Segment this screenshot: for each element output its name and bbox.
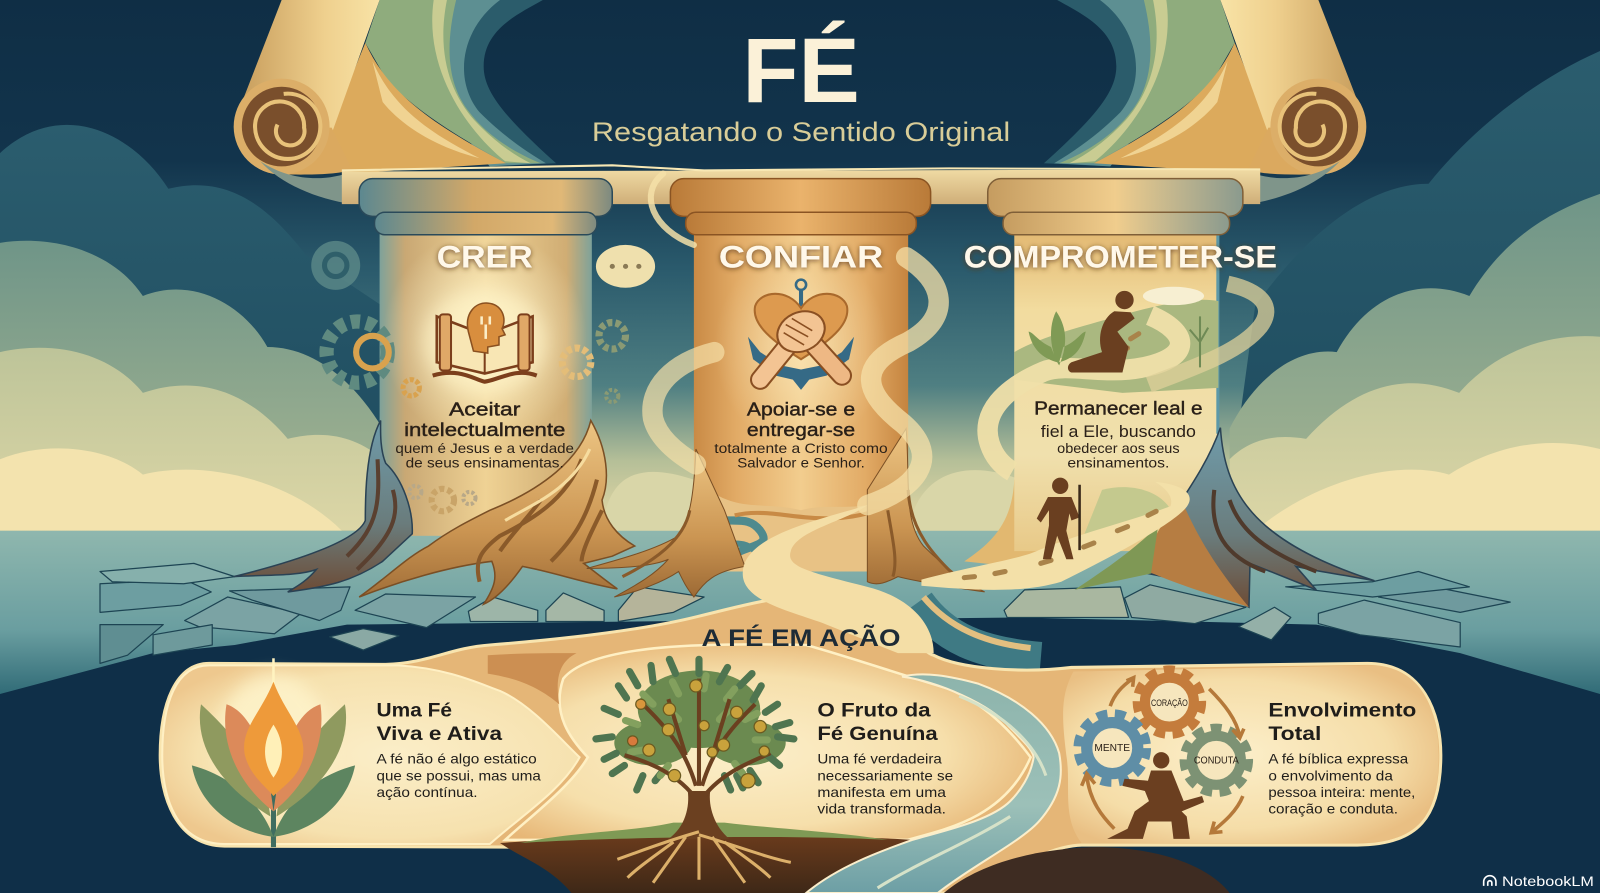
text: comprometer-se description: ensinamentos. bbox=[1067, 455, 1169, 471]
text: uma fé viva e ativa: ação contínua. bbox=[377, 785, 478, 801]
tan fold above panel one bbox=[488, 653, 577, 704]
gear: mente bbox=[1080, 715, 1145, 781]
text: o fruto da fé genuína: necessariamente se bbox=[817, 769, 953, 785]
gear: conduta bbox=[1186, 730, 1247, 791]
right parchment scroll bbox=[1044, 0, 1366, 175]
inner leaves bbox=[626, 676, 767, 776]
decorative gears around crer bbox=[311, 241, 655, 511]
text: envolvimento total: o envolvimento da bbox=[1268, 769, 1393, 785]
sea bbox=[0, 531, 1600, 696]
text: confiar description bbox=[714, 398, 888, 471]
icon: book scroll and head bbox=[423, 291, 546, 393]
roots: crer bbox=[234, 420, 635, 604]
pillar: confiar bbox=[670, 179, 931, 572]
text: crer description: Aceitar bbox=[449, 398, 520, 419]
gear: conduta: CONDUTA bbox=[1194, 755, 1239, 766]
icon: heart anchor and clasped hands bbox=[748, 280, 854, 390]
grass under tree bbox=[520, 823, 888, 843]
cracked rock ground bbox=[100, 563, 1510, 663]
right clouds bbox=[1224, 51, 1600, 531]
icon: fruit tree bbox=[596, 659, 794, 883]
text: crer description: quem é Jesus e a verdade bbox=[395, 441, 574, 457]
tree roots bbox=[617, 832, 791, 883]
ribbons around confiar bbox=[651, 173, 939, 505]
right soil bbox=[944, 847, 1230, 893]
text: uma fé viva e ativa: Viva e Ativa bbox=[377, 723, 502, 745]
text: uma fé viva e ativa bbox=[377, 699, 541, 801]
text: uma fé viva e ativa: que se possui, mas uma bbox=[377, 769, 541, 785]
gear: coração: CORAÇÃO bbox=[1151, 698, 1188, 708]
left clouds bbox=[0, 125, 383, 531]
pillar heading: crer: CRER bbox=[437, 238, 533, 274]
panel: a fé em ação banner bbox=[160, 597, 1441, 893]
roots: comprometer-se bbox=[1074, 428, 1374, 607]
pillar heading: comprometer-se: COMPROMETER-SE bbox=[964, 238, 1277, 274]
text: confiar description: entregar-se bbox=[747, 419, 855, 440]
left parchment scroll bbox=[234, 0, 556, 175]
trunk and branches bbox=[668, 791, 730, 839]
text: envolvimento total: A fé bíblica expressa bbox=[1268, 751, 1408, 767]
panel two bbox=[505, 644, 1031, 840]
text: envolvimento total: Envolvimento bbox=[1268, 699, 1417, 721]
soil under tree bbox=[500, 836, 914, 893]
text: confiar description: Apoiar-se e bbox=[747, 398, 855, 419]
text: o fruto da fé genuína: O Fruto da bbox=[817, 699, 931, 721]
roots: confiar bbox=[587, 429, 985, 597]
canopy mass bbox=[614, 671, 786, 765]
panel one bbox=[162, 665, 580, 844]
pillar heading: confiar: CONFIAR bbox=[719, 238, 883, 274]
icon: flame lotus bbox=[192, 658, 355, 847]
text: confiar description: totalmente a Cristo como bbox=[714, 441, 888, 457]
winding trail of comprometer-se bbox=[921, 284, 1266, 590]
text: comprometer-se description: fiel a Ele, buscando bbox=[1041, 423, 1196, 441]
text: uma fé viva e ativa: A fé não é algo estático bbox=[377, 751, 537, 767]
cream river bbox=[743, 505, 934, 653]
text: comprometer-se description: Permanecer leal e bbox=[1034, 397, 1203, 418]
text: crer description bbox=[395, 398, 574, 471]
heading: a fé em ação: A FÉ EM AÇÃO bbox=[702, 624, 901, 652]
entablature beam bbox=[260, 161, 1340, 204]
title: FÉ bbox=[742, 19, 860, 122]
subtitle: Resgatando o Sentido Original bbox=[592, 117, 1010, 147]
dark ground bbox=[0, 617, 1600, 893]
text: envolvimento total bbox=[1268, 699, 1417, 817]
text: uma fé viva e ativa: Uma Fé bbox=[377, 699, 452, 721]
text: crer description: intelectualmente bbox=[404, 419, 565, 440]
notebooklm watermark: NotebookLM bbox=[1502, 874, 1594, 889]
arrows around gears bbox=[1082, 678, 1244, 833]
stream highlights bbox=[878, 696, 1046, 888]
text: envolvimento total: pessoa inteira: mente, bbox=[1268, 785, 1415, 801]
text: comprometer-se description: obedecer aos seus bbox=[1057, 441, 1180, 457]
gear: mente: MENTE bbox=[1094, 743, 1130, 754]
fruits bbox=[628, 680, 769, 788]
text: envolvimento total: coração e conduta. bbox=[1268, 801, 1398, 817]
kneeling person juggling gears bbox=[1107, 752, 1204, 839]
background sky bbox=[0, 0, 1600, 536]
pillar: comprometer-se bbox=[964, 179, 1243, 572]
clouds behind pillars bbox=[602, 470, 1020, 531]
text: o fruto da fé genuína: manifesta em uma bbox=[817, 785, 946, 801]
icon: three gears with person bbox=[1080, 672, 1247, 839]
text: comprometer-se description bbox=[1034, 397, 1203, 471]
text: crer description: de seus ensinamentas. bbox=[406, 455, 564, 471]
river bands near the rocks bbox=[918, 597, 1041, 658]
text: o fruto da fé genuína: Uma fé verdadeira bbox=[817, 751, 942, 767]
panel three bbox=[1063, 665, 1439, 843]
icon: walking figure with staff bbox=[1037, 478, 1080, 559]
text: envolvimento total: Total bbox=[1268, 723, 1321, 745]
text: confiar description: Salvador e Senhor. bbox=[737, 455, 865, 471]
gear: coração bbox=[1139, 672, 1200, 733]
text: o fruto da fé genuína bbox=[817, 699, 953, 817]
text: o fruto da fé genuína: Fé Genuína bbox=[817, 723, 938, 745]
icon: kneeling figure with plants bbox=[1029, 291, 1208, 373]
pillar: crer bbox=[311, 179, 655, 536]
text: o fruto da fé genuína: vida transformada. bbox=[817, 801, 946, 817]
blue stream bbox=[806, 674, 1061, 893]
outer leaves bbox=[596, 659, 794, 790]
